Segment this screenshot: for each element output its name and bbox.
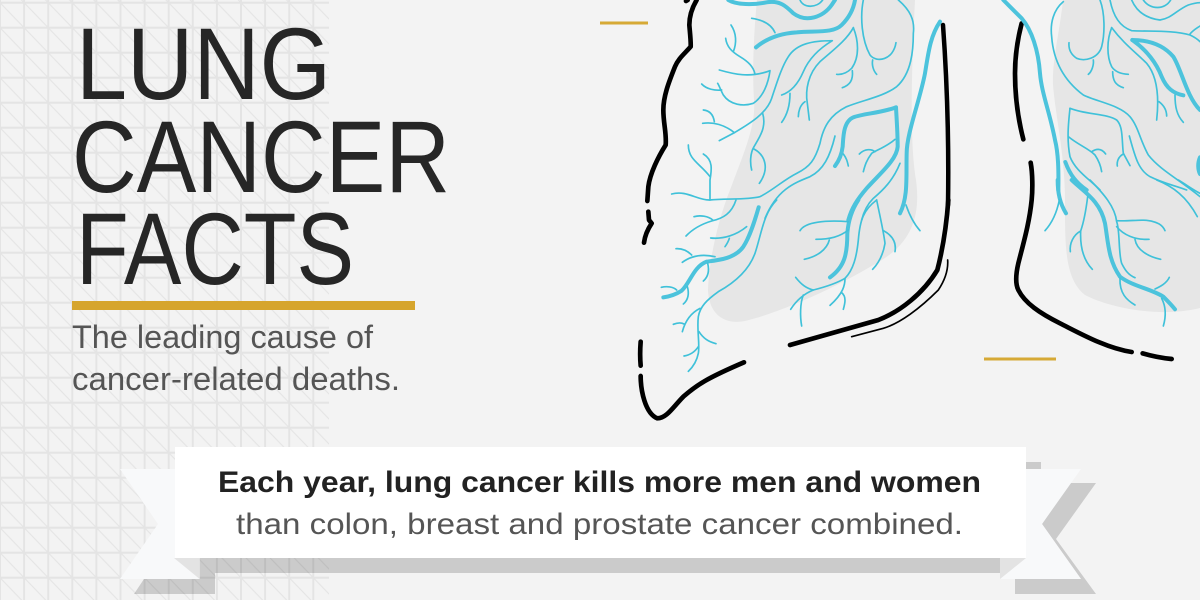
left lung shaded area xyxy=(708,0,917,322)
banner shadow xyxy=(134,462,1096,594)
right lung blue airways lower xyxy=(1045,180,1200,326)
ribbon folds xyxy=(174,558,1026,579)
right lung shaded area xyxy=(1053,0,1200,312)
title: LUNG xyxy=(76,7,331,121)
right lung black outline xyxy=(1015,23,1023,139)
right ribbon tail xyxy=(1000,469,1081,579)
banner bold text: Each year, lung cancer kills more men and women xyxy=(218,466,981,499)
subtitle: The leading cause of xyxy=(72,319,373,355)
banner panel xyxy=(175,447,1026,558)
gold title underline xyxy=(72,301,415,310)
background grid pattern xyxy=(0,0,329,600)
subtitle xyxy=(72,319,400,397)
title xyxy=(72,7,450,306)
banner regular text: than colon, breast and prostate cancer combined. xyxy=(236,508,963,541)
right lung lower black outline xyxy=(1016,163,1172,359)
title: CANCER xyxy=(72,100,450,214)
left ribbon tail xyxy=(120,469,200,579)
title: FACTS xyxy=(76,192,354,306)
subtitle: cancer-related deaths. xyxy=(72,361,400,397)
left lung blue airways lower xyxy=(661,200,920,371)
gold accent line top xyxy=(600,22,648,24)
left lung blue airways upper xyxy=(672,0,940,220)
gold accent line bottom xyxy=(984,358,1056,360)
lungs illustration xyxy=(640,0,1200,418)
banner ribbon xyxy=(120,447,1096,594)
left bronchus black line xyxy=(943,25,948,205)
left lung black outline xyxy=(647,0,697,201)
left lung lower black outline xyxy=(640,200,948,418)
right lung blue airways upper xyxy=(1003,0,1200,197)
